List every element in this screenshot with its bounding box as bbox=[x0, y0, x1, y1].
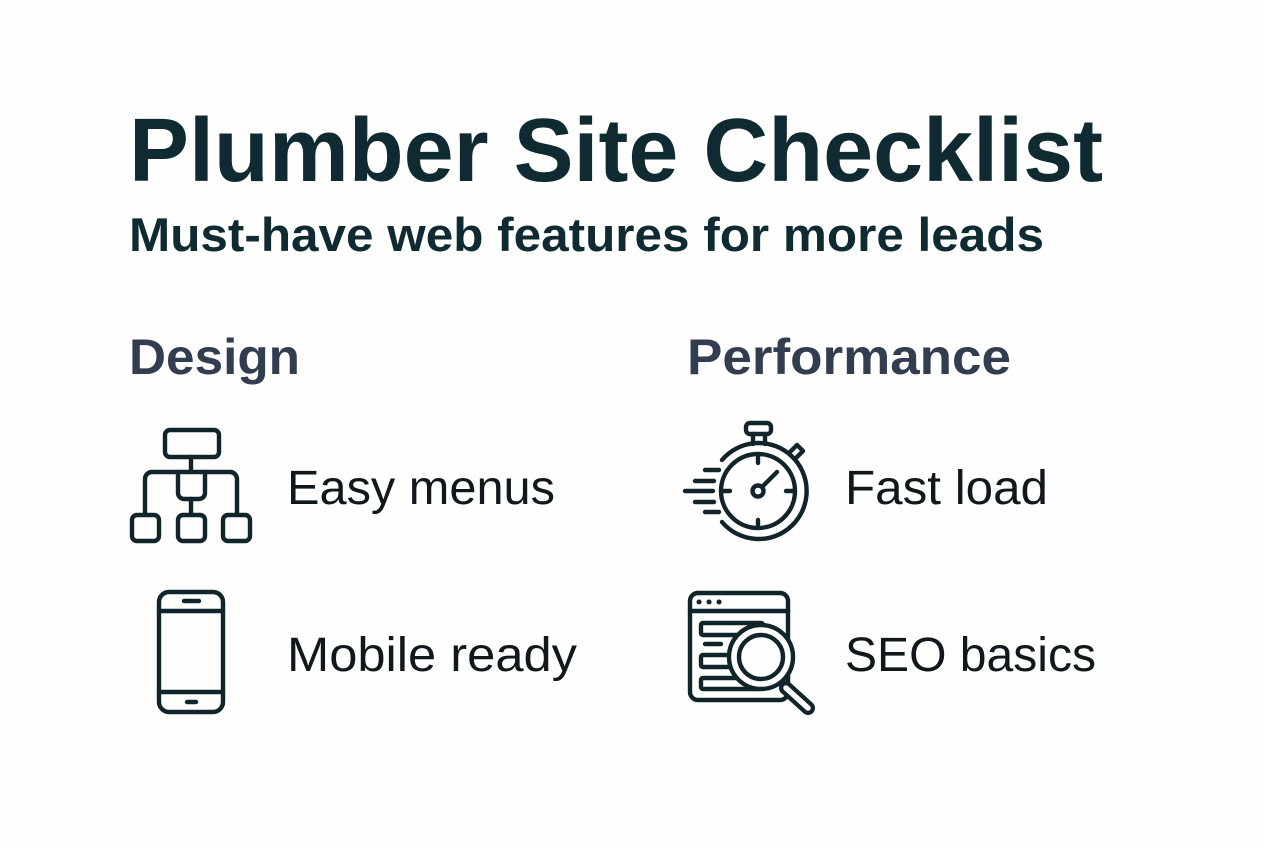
subtitle: Must-have web features for more leads bbox=[129, 208, 1044, 261]
icon: browser with magnifier bbox=[690, 593, 808, 708]
icon: site menu hierarchy bbox=[132, 430, 250, 541]
title: Plumber Site Checklist bbox=[129, 101, 1103, 201]
panel: design bbox=[129, 329, 577, 712]
heading: performance: Performance bbox=[687, 329, 1011, 385]
label: mobile ready: Mobile ready bbox=[287, 629, 577, 682]
icon: mobile phone bbox=[159, 592, 223, 712]
label: easy menus: Easy menus bbox=[287, 462, 555, 515]
heading: design: Design bbox=[129, 329, 300, 385]
label: seo basics: SEO basics bbox=[845, 629, 1096, 682]
label: fast load: Fast load bbox=[845, 462, 1048, 515]
panel: performance bbox=[685, 329, 1096, 708]
icon: stopwatch bbox=[685, 423, 807, 539]
